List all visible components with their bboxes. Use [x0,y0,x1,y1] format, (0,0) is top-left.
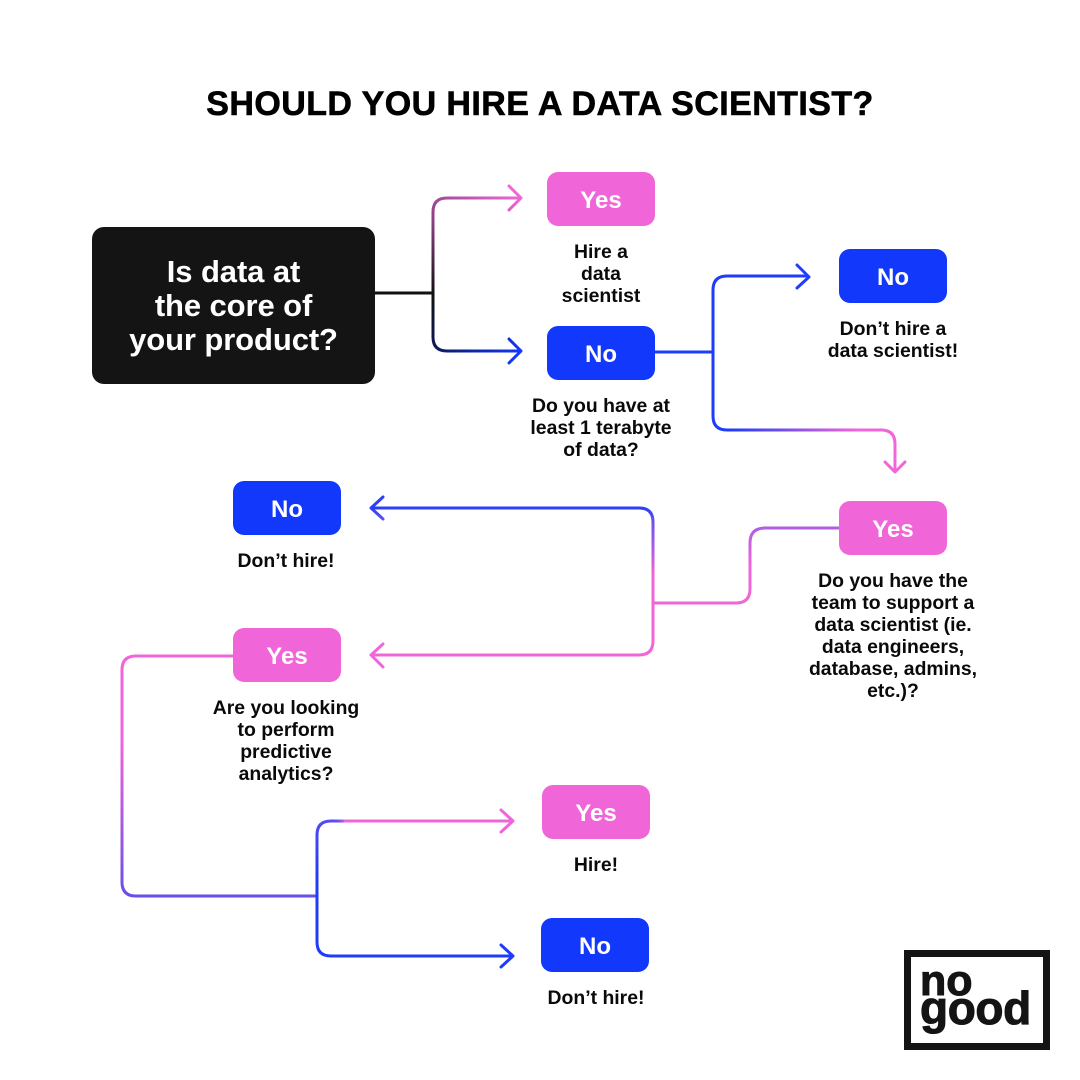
yes box: team [839,501,947,555]
text: team question: Do you have the [818,570,968,592]
no box: final no: No [579,933,611,960]
yes box: team: Yes [872,516,914,543]
text: hire a data scientist: scientist [562,285,640,307]
text: don't hire: Don’t hire! [238,550,334,572]
yes box: final hire [542,785,650,839]
yes box: predictive: Yes [266,643,308,670]
text: hire a data scientist: data [581,263,621,285]
text: don't hire a data scientist: data scientist! [828,340,958,362]
no box: terabyte [547,326,655,380]
text: team question [809,570,977,702]
connector: predictive Yes to outcomes [122,656,513,967]
no box: team no: No [271,496,303,523]
text: terabyte question [530,395,672,461]
no box: final no [541,918,649,972]
main question box: your product? [129,322,338,357]
logo: no good [904,950,1050,1050]
text: hire a data scientist: Hire a [574,241,628,263]
text: predictive question [213,697,359,785]
text: don't hire a data scientist: Don’t hire a [840,318,946,340]
text: final don't hire: Don’t hire! [548,987,644,1009]
text: terabyte question: least 1 terabyte [530,417,672,439]
text: terabyte question: of data? [563,439,639,461]
text: hire: Hire! [574,854,618,876]
no box: don't hire [839,249,947,303]
connector: team Yes to outcomes [371,497,839,667]
yes box: hire: Yes [580,187,622,214]
yes box: hire [547,172,655,226]
main question box [92,227,375,384]
text: team question: database, admins, [809,658,977,680]
yes box: predictive [233,628,341,682]
text: team question: etc.)? [867,680,919,702]
text: predictive question: to perform [238,719,334,741]
text: team question: data scientist (ie. [814,614,972,636]
logo: no good: good [920,982,1031,1034]
logo: no good: no [920,957,973,1005]
title: SHOULD YOU HIRE A DATA SCIENTIST? [206,85,874,123]
text: don't hire a data scientist [828,318,958,362]
text: hire a data scientist [562,241,640,307]
connector: core question to branches [375,186,521,363]
yes box: final hire: Yes [575,800,617,827]
main question box: the core of [155,288,312,323]
connector: terabyte No to outcomes [655,265,905,472]
text: predictive question: analytics? [239,763,333,785]
no box: don't hire: No [877,264,909,291]
text: terabyte question: Do you have at [532,395,670,417]
text: predictive question: Are you looking [213,697,359,719]
text: predictive question: predictive [240,741,332,763]
text: team question: team to support a [812,592,974,614]
no box: team no [233,481,341,535]
main question box: Is data at [167,254,300,289]
no box: terabyte: No [585,341,617,368]
text: team question: data engineers, [822,636,964,658]
